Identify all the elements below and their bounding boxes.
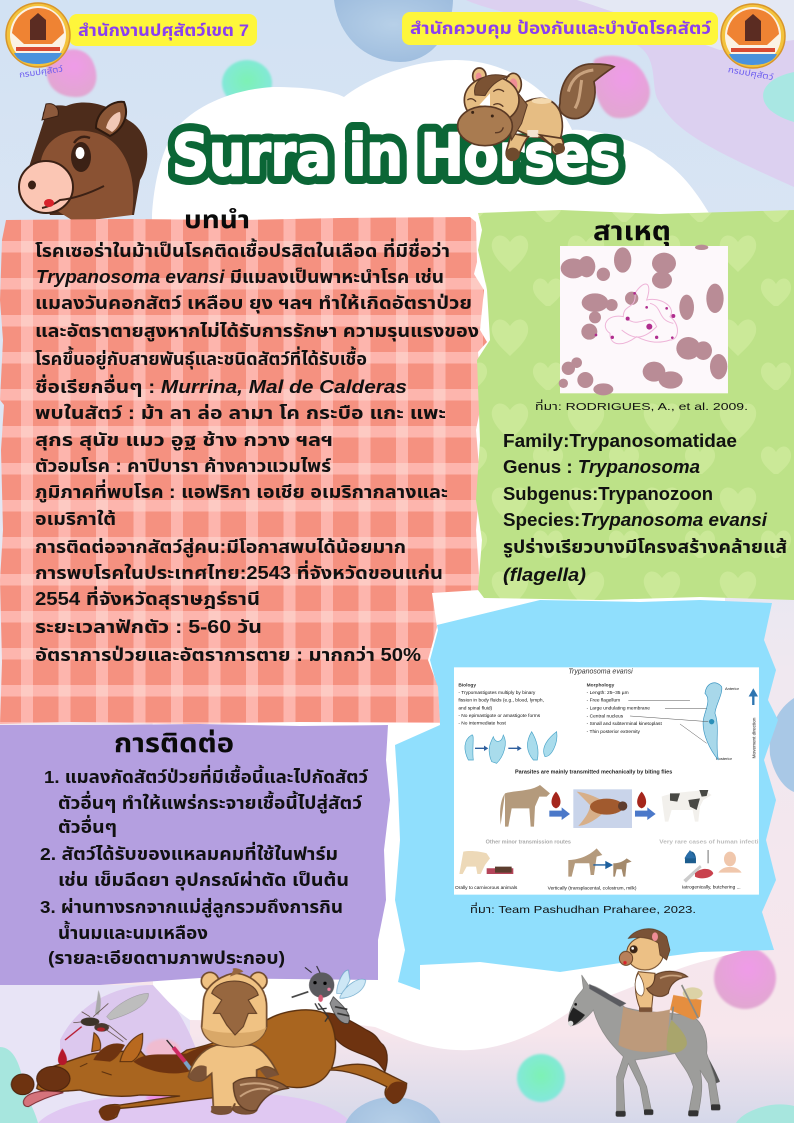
- heading: introduction: บทนำ: [184, 206, 250, 234]
- text block: introduction body: ระยะเวลาฟักตัว : 5-60 วัน: [35, 617, 262, 637]
- micrograph: trypanosomes among red blood cells: [559, 245, 728, 395]
- logo left: กรมปศุสัตว์: [18, 64, 64, 80]
- text block: introduction body: Trypanosoma evansi มีแมลงเป็นพาหะนำโรค เช่น: [36, 267, 444, 287]
- icon: brown horse head: [19, 102, 147, 222]
- title: Surra in Horses: [172, 121, 620, 189]
- image: Trypanosoma evansi summary: Parasites are mainly transmitted mechanically by biting flies: [515, 770, 672, 776]
- logo right: กรมปศุสัตว์: [727, 64, 774, 82]
- image: Trypanosoma evansi summary: Posterior: [716, 756, 733, 761]
- text block: introduction body: การพบโรคในประเทศไทย:2543 ที่จังหวัดขอนแก่น: [35, 560, 443, 583]
- icon: syringe: [167, 1040, 191, 1069]
- text block: introduction body: โรคเซอร่าในม้าเป็นโรคติดเชื้อปรสิตในเลือด ที่มีชื่อว่า: [35, 238, 450, 261]
- heading: transmission: การติดต่อ: [114, 728, 234, 758]
- text block: introduction body: 2554 ที่จังหวัดสุราษฎร์ธานี: [35, 586, 260, 610]
- image: Trypanosoma evansi summary: - Central nucleus: [587, 713, 624, 719]
- image: Trypanosoma evansi summary: Morphology: [587, 682, 615, 688]
- text block: transmission routes: ตัวอื่นๆ: [58, 814, 117, 837]
- icon: biting mosquito with blood drop: [58, 990, 148, 1065]
- panel: transmission diagram: [395, 600, 778, 990]
- icon: small horse riding donkey: [619, 929, 688, 1012]
- image: Trypanosoma evansi summary: Other minor transmission routes: [486, 840, 571, 846]
- image: Trypanosoma evansi summary: Trypanosoma evansi: [568, 668, 633, 675]
- image: Trypanosoma evansi summary: - Large undulating membrane: [587, 706, 650, 712]
- text block: taxonomy: (flagella): [503, 565, 586, 585]
- header label left: [69, 14, 257, 46]
- bottom left animal scene: [11, 966, 407, 1121]
- text block: transmission routes: 3. ผ่านทางรกจากแม่สู่ลูกรวมถึงการกิน: [40, 897, 343, 918]
- header label right: [402, 12, 718, 45]
- image: Trypanosoma evansi summary: Iatrogenically, butchering ...: [682, 884, 741, 890]
- icon: donkey with saddle: [568, 975, 720, 1117]
- text block: introduction body: อเมริกาใต้: [35, 509, 116, 529]
- text block: introduction body: ภูมิภาคที่พบโรค : แอฟริกา เอเชีย อเมริกากลางและ: [35, 479, 448, 503]
- caption: diagram source: ที่มา: Team Pashudhan Praharee, 2023.: [470, 902, 696, 916]
- logo right: [721, 4, 785, 82]
- icon: grey cartoon mosquito on horse: [292, 966, 366, 1023]
- text block: introduction body: การติดต่อจากสัตว์สู่คน:มีโอกาสพบได้น้อยมาก: [35, 537, 406, 558]
- text block: introduction body: แมลงวันคอกสัตว์ เหลือบ ยุง ฯลฯ ทำให้เกิดอัตราป่วย: [35, 293, 472, 314]
- text block: transmission routes: [40, 764, 368, 968]
- image: Trypanosoma evansi summary: - Thin posterior extremity: [587, 729, 641, 735]
- text block: introduction body: พบในสัตว์ : ม้า ลา ล่อ ลามา โค กระบือ แกะ แพะ: [35, 403, 446, 423]
- image: Trypanosoma evansi summary: - Small and subterminal kinetoplast: [587, 721, 662, 727]
- image: Trypanosoma evansi summary: - No intermediate host: [458, 721, 506, 727]
- image: Trypanosoma evansi summary: - Trypomastigotes multiply by binary: [458, 690, 536, 696]
- text block: transmission routes: เช่น เข็มฉีดยา อุปกรณ์ผ่าตัด เป็นต้น: [58, 870, 349, 891]
- image: Trypanosoma evansi summary: Very rare cases of human infecti: [659, 840, 759, 846]
- image: Trypanosoma evansi summary: fission in body fluids (e.g., blood, lymph,: [458, 698, 544, 704]
- logo left: [6, 3, 70, 80]
- image: Trypanosoma evansi summary: [454, 667, 759, 895]
- text block: transmission routes: น้ำนมและนมเหลือง: [58, 920, 208, 943]
- image: Trypanosoma evansi summary: Biology: [458, 682, 476, 688]
- image: Trypanosoma evansi summary: Movement direction: [752, 717, 757, 758]
- header label left: สำนักงานปศุสัตว์เขต 7: [78, 21, 249, 41]
- donkey scene: [568, 929, 720, 1117]
- white cloud: [152, 60, 745, 1050]
- image: Trypanosoma evansi summary: Vertically (transplacental, colostrum, milk): [548, 886, 637, 892]
- panel: cause: [476, 210, 794, 600]
- text block: transmission routes: 1. แมลงกัดสัตว์ป่วยที่มีเชื้อนี้และไปกัดสัตว์: [44, 764, 368, 787]
- text block: transmission routes: (รายละเอียดตามภาพประกอบ): [48, 948, 285, 968]
- caption: micrograph source: ที่มา: RODRIGUES, A., et al. 2009.: [535, 399, 748, 413]
- text block: taxonomy: รูปร่างเรียวบางมีโครงสร้างคล้ายแส้: [503, 537, 787, 558]
- text block: taxonomy: Genus : Trypanosoma: [503, 457, 700, 477]
- icon: sleeping horse: [458, 64, 614, 161]
- image: Trypanosoma evansi summary: - Free flagellum: [587, 698, 620, 704]
- image: Trypanosoma evansi summary: Anterior: [725, 686, 740, 691]
- icon: sick horse lying down: [11, 1010, 407, 1121]
- image: Trypanosoma evansi summary: - No epimastigote or amastigote forms: [458, 713, 541, 719]
- text block: transmission routes: ตัวอื่นๆ ทำให้แพร่กระจายเชื้อนี้ไปสู่สัตว์: [58, 790, 362, 814]
- title: Surra in Horses: [172, 121, 620, 189]
- text block: introduction body: ชื่อเรียกอื่นๆ : Murrina, Mal de Calderas: [35, 374, 407, 397]
- text block: taxonomy: Species:Trypanosoma evansi: [503, 510, 768, 530]
- text block: taxonomy: [503, 431, 787, 585]
- text block: taxonomy: Subgenus:Trypanozoon: [503, 484, 713, 504]
- panel: transmission: [0, 724, 390, 985]
- image: Trypanosoma evansi summary: - Length: 25–35 µm: [587, 690, 629, 696]
- image: Trypanosoma evansi summary: and spinal fluid): [458, 705, 493, 711]
- text block: introduction body: โรคขึ้นอยู่กับสายพันธุ์และชนิดสัตว์ที่ได้รับเชื้อ: [35, 346, 367, 370]
- text block: introduction body: และอัตราตายสูงหากไม่ได้รับการรักษา ความรุนแรงของ: [35, 321, 479, 342]
- text block: introduction body: [35, 238, 479, 665]
- text block: transmission routes: 2. สัตว์ได้รับของแหลมคมที่ใช้ในฟาร์ม: [40, 841, 338, 864]
- text block: introduction body: อัตราการป่วยและอัตราการตาย : มากกว่า 50%: [35, 645, 421, 665]
- text block: introduction body: ตัวอมโรค : คาปิบารา ค้างคาวแวมไพร์: [35, 456, 331, 476]
- heading: cause: สาเหตุ: [593, 216, 671, 247]
- blue watercolor circle top: [334, 0, 453, 62]
- text block: taxonomy: Family:Trypanosomatidae: [503, 431, 737, 451]
- image: Trypanosoma evansi summary: Orally to carnivorous animals: [455, 885, 518, 891]
- panel: introduction: [0, 206, 487, 724]
- header label right: สำนักควบคุม ป้องกันและบำบัดโรคสัตว์: [410, 19, 711, 39]
- icon: standing horse seen from behind: [188, 968, 288, 1114]
- text block: introduction body: สุกร สุนัข แมว อูฐ ช้าง กวาง ฯลฯ: [35, 430, 333, 451]
